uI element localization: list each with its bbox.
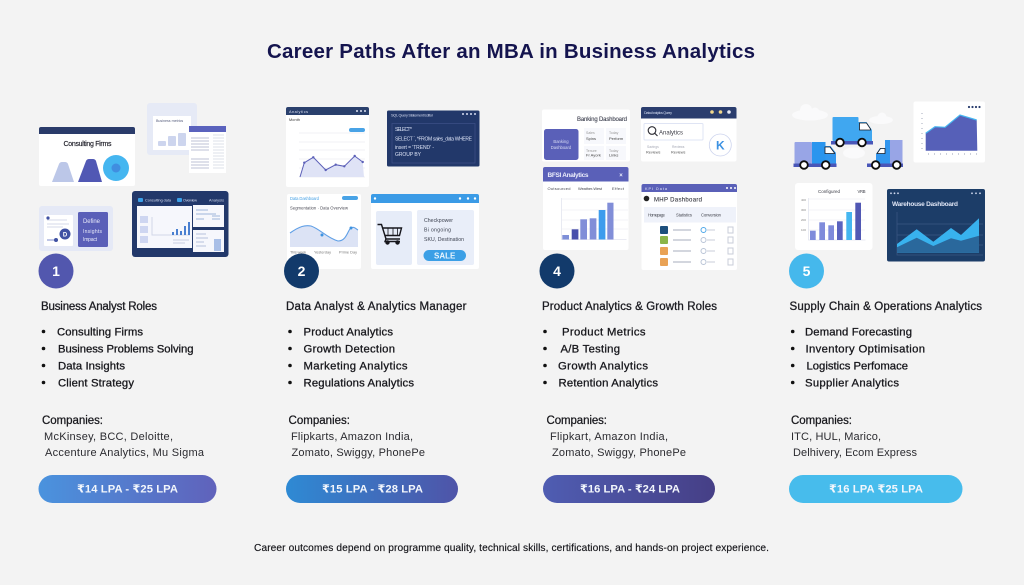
companies: Companies: [42, 415, 103, 427]
companies: Zomato, Swiggy, PhonePe [552, 447, 686, 459]
number badge 4 [540, 254, 574, 288]
heading: data analyst and analytics manager: Data Analyst & Analytics Manager [286, 301, 467, 313]
salary pill [543, 475, 715, 503]
card: area chart: Prime Day [339, 250, 357, 254]
companies [42, 415, 205, 459]
number badge 4: 4 [553, 263, 561, 279]
number badge 5: 5 [803, 263, 811, 279]
icon: magnifier [648, 127, 658, 136]
card: banking dashboard: Spins [586, 136, 596, 141]
card: document [189, 126, 226, 173]
card: analytics search: Analytics [659, 130, 683, 136]
bullet list: Data Insights [58, 360, 125, 372]
companies: Companies: [288, 415, 350, 427]
card: dark dashboard: Analysis [209, 198, 224, 202]
card: bar chart: 300 [801, 208, 806, 212]
companies: Zomato, Swiggy, PhonePe [292, 447, 425, 459]
bullet list: Regulations Analytics [304, 378, 414, 390]
card: consulting firms [39, 127, 135, 186]
card: sql editor: SQL Query Statement Editor [391, 114, 434, 118]
salary pill: ₹15 LPA - ₹28 LPA [322, 484, 423, 496]
card: bar chart: 400 [801, 198, 806, 202]
companies: Flipkarts, Amazon India, [291, 431, 413, 443]
card: shopping cart and sale: Bi ongoing [424, 228, 451, 234]
card: shopping cart and sale: Checkpower [424, 218, 453, 224]
number badge 1: 1 [52, 263, 60, 279]
card: analytics search: Savings [647, 145, 659, 149]
icon: truck right [867, 140, 903, 169]
card: analytics search: K [716, 138, 725, 152]
bullet list [42, 326, 194, 390]
card: report with bars [147, 103, 197, 155]
card: shopping cart and sale [371, 194, 479, 269]
card: banking dashboard: Dashboard [551, 145, 572, 150]
salary pill: ₹16 LPA - ₹24 LPA [580, 484, 680, 496]
illustration: consulting dashboards [39, 103, 228, 257]
companies: Delhivery, Ecom Express [793, 447, 918, 459]
card: bfsi analytics bar chart: BFSI Analytics [548, 172, 589, 179]
salary pill: ₹16 LPA ₹25 LPA [829, 484, 923, 496]
card: area chart [914, 102, 985, 162]
bullet list: Retention Analytics [558, 378, 658, 390]
card: banking dashboard: Today [609, 149, 619, 153]
card: bar chart: Configured [818, 189, 840, 194]
salary pill [286, 475, 458, 503]
icon: shopping cart [378, 224, 402, 244]
bullet list [791, 326, 925, 390]
card: product dashboard list [642, 184, 737, 270]
number badge 2: 2 [298, 263, 306, 279]
bullet list: Product Metrics [562, 326, 646, 338]
card: area chart: This week [290, 250, 306, 254]
card: define insights [39, 206, 113, 251]
bullet list: Supplier Analytics [805, 378, 899, 390]
bullet list: Logistics Perfomace [806, 360, 908, 372]
bullet list: Growth Detection [304, 344, 395, 356]
illustration: product dashboards [542, 107, 737, 270]
title: Career Paths After an MBA in Business Analytics [267, 40, 755, 63]
card: product dashboard list: Statistics [676, 212, 692, 218]
bullet list: Business Problems Solving [58, 344, 194, 356]
bullet list [543, 326, 658, 390]
card: sql editor: SELECT `, *FROM sales_data WHERE [395, 136, 473, 142]
card: dark dashboard: Overview [183, 198, 197, 202]
card: analytics search: Reviews [671, 150, 685, 154]
bullet list: Growth Analytics [558, 360, 648, 372]
card: area chart: Data Dashboard [290, 196, 320, 201]
bullet list: Inventory Optimisation [806, 344, 925, 356]
card: warehouse dashboard: Warehouse Dashboard [892, 201, 958, 208]
salary pill [789, 475, 962, 503]
companies: ITC, HUL, Marico, [791, 431, 881, 443]
card: bar chart: 100 [801, 228, 806, 232]
card: bar chart [795, 183, 872, 250]
salary pill [38, 475, 216, 503]
card: area chart: Segmentation · Data Overview [290, 206, 349, 210]
companies [288, 415, 425, 459]
card: product dashboard list: MHP Dashboard [654, 198, 702, 204]
bullet list: Marketing Analytics [304, 360, 408, 372]
bullet list: Product Analytics [304, 326, 393, 338]
card: sql editor: insert = 'TREND' - [395, 145, 434, 151]
card: warehouse dashboard [887, 189, 985, 262]
footnote: Career outcomes depend on programme quality, technical skills, certifications, and hands-on project experience. [254, 543, 769, 554]
card: banking dashboard: Banking Dashboard [577, 117, 627, 123]
card: line chart: Month [289, 118, 300, 122]
card: shopping cart and sale: SKU, Destination [424, 237, 464, 243]
card: banking dashboard: Perform [609, 136, 624, 141]
card: bfsi analytics bar chart: Effect [612, 186, 625, 191]
panel: supply chain and operations analytics [789, 102, 985, 503]
card: consulting firms: Consulting Firms [64, 141, 112, 148]
card: product dashboard list: KPI Data [645, 187, 668, 191]
number badge 2 [284, 254, 319, 288]
card: analytics search: Reviews [672, 145, 685, 149]
card: line chart: Analytics [289, 110, 308, 114]
card: bar chart: 200 [801, 218, 806, 222]
card: banking dashboard: Banking [553, 139, 569, 144]
illustration: data analysis screens [286, 107, 480, 269]
card: define insights: Impact [83, 237, 98, 243]
illustration: logistics and warehouse [792, 102, 985, 262]
card: analytics search [641, 107, 736, 162]
card: line chart [286, 107, 369, 187]
salary pill: ₹14 LPA - ₹25 LPA [77, 484, 178, 496]
heading: business analyst roles: Business Analyst Roles [41, 301, 157, 313]
card: sql editor [387, 110, 480, 166]
card: bfsi analytics bar chart: Outsourced [548, 186, 570, 191]
card: product dashboard list: Conversion [701, 212, 722, 218]
clouds [792, 104, 893, 158]
card: area chart [287, 194, 361, 269]
bullet list: Demand Forecasting [805, 326, 912, 338]
card: bfsi analytics bar chart: Weather-West [578, 186, 603, 191]
card: dark dashboard: Consulting data [145, 198, 172, 202]
card: analytics search: Data Analytics Query [644, 111, 672, 115]
card: bar chart: VRB [858, 189, 866, 194]
companies: Companies: [791, 415, 852, 427]
card: banking dashboard: Today [609, 131, 619, 135]
card: banking dashboard: Sales [586, 131, 595, 135]
card: report with bars: Business metrics [156, 119, 183, 123]
icon: truck top [831, 117, 873, 146]
heading: product analytics and growth roles: Product Analytics & Growth Roles [542, 301, 717, 313]
bullet list [288, 326, 414, 390]
card: shopping cart and sale: SALE [434, 252, 456, 260]
companies [546, 415, 686, 459]
bullet list: Client Strategy [58, 378, 134, 390]
companies: McKinsey, BCC, Deloitte, [44, 431, 173, 443]
card: banking dashboard: Fr Ayork [586, 152, 601, 158]
card: area chart: Yesterday [314, 250, 331, 254]
number badge 5 [789, 254, 824, 288]
card: banking dashboard: Tenure [586, 149, 597, 153]
card: analytics search: Reviews [646, 150, 660, 154]
number badge 1 [38, 254, 74, 288]
card: sql editor: GROUP BY [395, 152, 422, 158]
companies [791, 415, 918, 459]
card: define insights: D [63, 232, 68, 238]
card: bfsi analytics bar chart: × [619, 173, 623, 179]
icon: truck left [794, 142, 836, 169]
card: banking dashboard: Links [609, 152, 618, 158]
panel: product analytics and growth roles [540, 107, 737, 503]
card: define insights: Define [83, 219, 101, 225]
panel: business analyst roles [38, 103, 228, 503]
companies: Accenture Analytics, Mu Sigma [45, 447, 205, 459]
companies: Companies: [546, 415, 607, 427]
card: banking dashboard [542, 110, 630, 162]
panel: data analyst and analytics manager [284, 107, 480, 503]
card: dark dashboard [132, 191, 228, 257]
heading: supply chain and operations analytics: Supply Chain & Operations Analytics [790, 301, 982, 313]
card: bfsi analytics bar chart [543, 167, 628, 250]
bullet list: A/B Testing [560, 344, 620, 356]
card: define insights: Insights [83, 229, 102, 235]
card: sql editor: SELECT * [395, 127, 412, 133]
card: product dashboard list: Homepage [648, 212, 666, 218]
bullet list: Consulting Firms [57, 326, 143, 338]
companies: Flipkart, Amazon India, [550, 431, 668, 443]
